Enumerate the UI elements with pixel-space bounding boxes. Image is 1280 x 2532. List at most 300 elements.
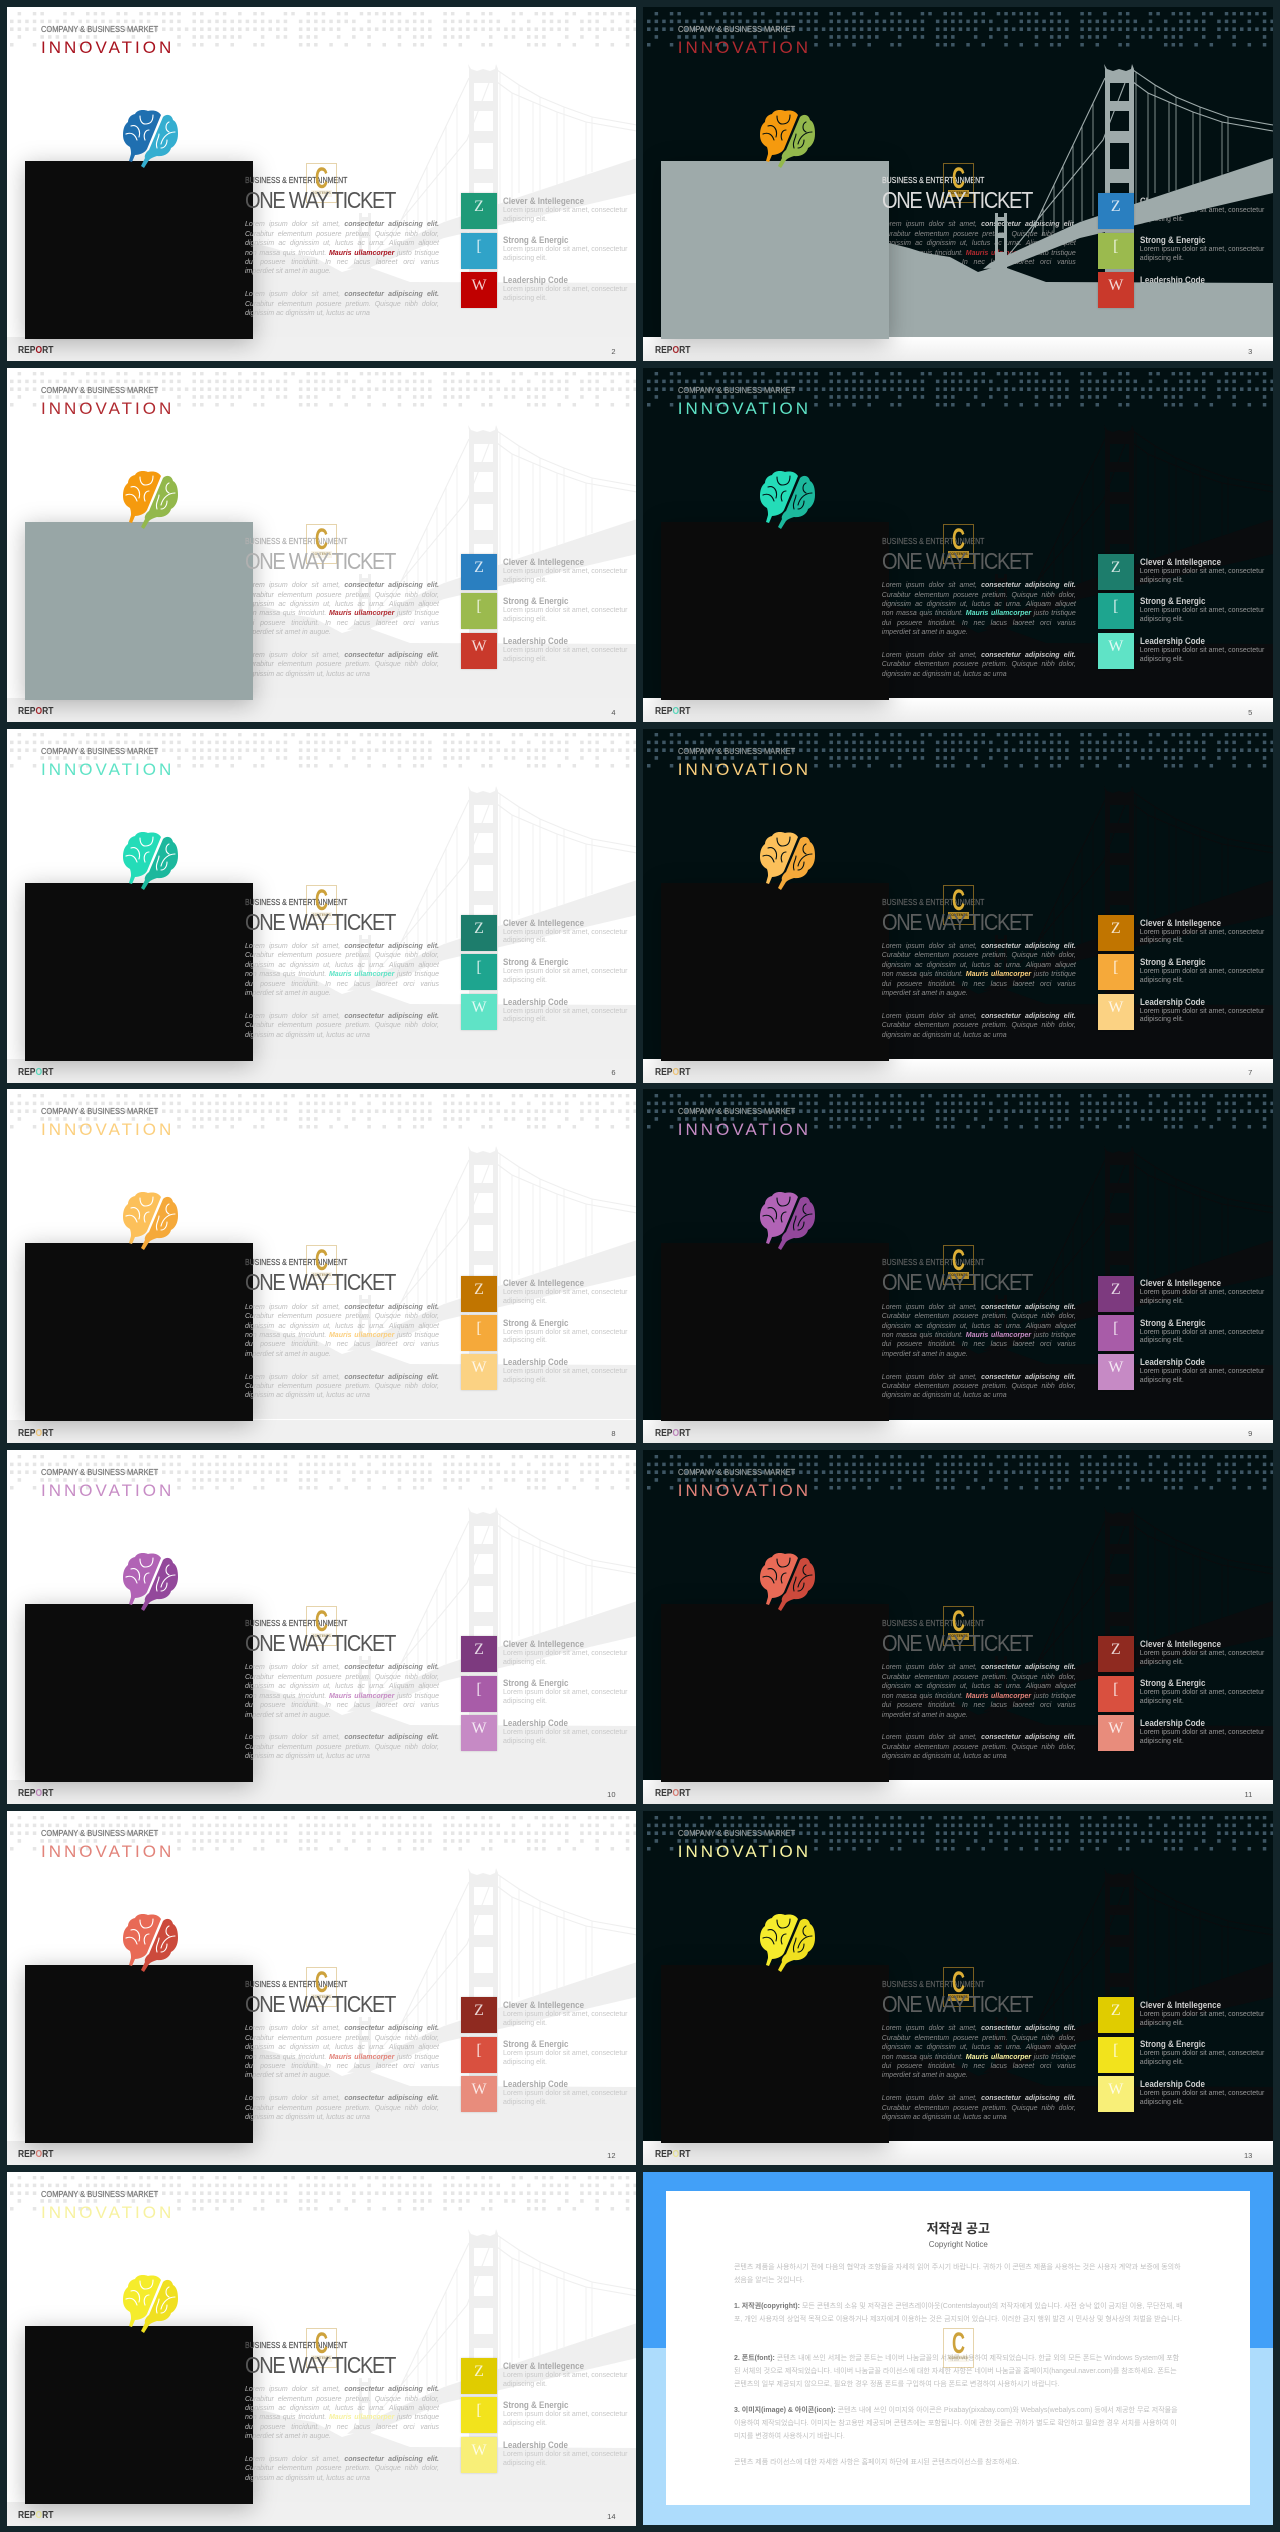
square I <box>1098 1315 1134 1351</box>
square W <box>461 994 497 1030</box>
text block: non massa quis tincidunt. Mauris ullamcorper justo tristique <box>245 971 439 978</box>
illustration: bridge <box>643 1089 1273 1436</box>
header: COMPANY & BUSINESS MARKET <box>678 1467 795 1477</box>
text block: Lorem ipsum dolor sit amet, consectetur adipiscing elit. <box>245 291 439 298</box>
header: INNOVATION <box>678 399 811 418</box>
header: COMPANY & BUSINESS MARKET <box>678 1106 795 1116</box>
item: strong: Strong & Energic <box>1140 1678 1205 1688</box>
text block: non massa quis tincidunt. Mauris ullamcorper justo tristique <box>882 610 1076 617</box>
header <box>41 2189 181 2220</box>
text block: dignissim ac dignissim ut, luctus ac urna <box>882 1032 1007 1039</box>
square I <box>461 954 497 990</box>
square W <box>1098 1354 1134 1390</box>
item: strong <box>503 957 628 984</box>
icon: brain <box>123 471 178 529</box>
item: leadership: Leadership Code <box>503 1718 568 1728</box>
panel: slide 5 <box>643 368 1273 722</box>
text block: dignissim ac dignissim ut, luctus ac urna <box>245 1032 370 1039</box>
text block: non massa quis tincidunt. Mauris ullamcorper justo tristique <box>882 250 1076 257</box>
square I <box>1098 2037 1134 2073</box>
text block: dui posuere tincidunt. In nec lacus laoreet orci varius <box>882 259 1076 266</box>
square W: W <box>1108 1720 1123 1737</box>
item: strong <box>1140 596 1264 623</box>
square Z: Z <box>474 1281 484 1298</box>
item: clever <box>1140 918 1264 944</box>
item: leadership <box>1140 275 1264 302</box>
logo: C <box>315 884 328 917</box>
notice intro: 콘텐츠 제품을 사용하시기 전에 다음의 협약과 조항들을 자세히 읽어 주시기 바랍니다. 귀하가 이 콘텐츠 제품을 사용하는 것은 사용자 계약과 보증에 동의하셨음을 알리는 것입니다. <box>734 2264 1181 2284</box>
square I: [ <box>1113 1320 1118 1337</box>
text block: Lorem ipsum dolor sit amet, consectetur adipiscing elit. <box>882 1664 1076 1671</box>
text block: Lorem ipsum dolor sit amet, consectetur adipiscing elit. <box>245 943 439 950</box>
text block <box>882 220 1076 317</box>
text block: dignissim ac dignissim ut, luctus ac urna <box>882 671 1007 678</box>
logo <box>943 1606 974 1646</box>
header <box>41 1828 181 1859</box>
icon: brain <box>760 1192 815 1252</box>
header <box>678 1467 818 1498</box>
illustration: bridge <box>6 1089 636 1436</box>
heading: ONE WAY TICKET <box>245 1991 395 2017</box>
heading: ONE WAY TICKET <box>245 1630 395 1656</box>
text block: dignissim ac dignissim ut, luctus ac urna. Aliquam aliquet <box>882 601 1076 608</box>
item: clever: Clever & Intellegence <box>1140 1639 1221 1649</box>
square W: W <box>1108 638 1123 655</box>
square I: [ <box>1113 2042 1118 2059</box>
square Z <box>461 2358 497 2394</box>
text block: Lorem ipsum dolor sit amet, consectetur adipiscing elit. <box>245 221 439 228</box>
footer: report and page number: REPORT <box>18 1428 53 1439</box>
square W: W <box>471 2081 487 2098</box>
square W: W <box>471 1359 487 1376</box>
text block: dignissim ac dignissim ut, luctus ac urna. Aliquam aliquet <box>245 240 439 247</box>
notice title: 저작권 공고 <box>927 2221 990 2236</box>
header <box>41 1467 181 1498</box>
text block: imperdiet sit amet in augue. <box>882 268 968 275</box>
text block: non massa quis tincidunt. Mauris ullamcorper justo tristique <box>245 2054 439 2061</box>
text block: dui posuere tincidunt. In nec lacus laoreet orci varius <box>882 620 1076 627</box>
text block: imperdiet sit amet in augue. <box>882 2072 968 2079</box>
logo <box>943 524 974 564</box>
logo: CONTENTS <box>949 913 968 917</box>
item: strong: Strong & Energic <box>1140 957 1205 967</box>
header: INNOVATION <box>678 760 811 779</box>
item: clever <box>1140 196 1264 223</box>
square I: [ <box>1113 959 1118 976</box>
item: clever: Lorem ipsum dolor sit amet, consectetur adipiscing elit. <box>503 2011 628 2027</box>
logo: C <box>315 523 328 556</box>
header <box>41 385 174 418</box>
text block: Curabitur elementum posuere pretium. Quisque nibh dolor, <box>245 231 439 238</box>
image placeholder <box>661 1243 889 1421</box>
square W: W <box>1108 2081 1123 2098</box>
text block: Curabitur elementum posuere pretium. Quisque nibh dolor, <box>882 1313 1076 1320</box>
square I <box>1098 593 1134 629</box>
item: clever <box>503 1639 631 1669</box>
item: strong: Strong & Energic <box>503 1318 568 1328</box>
icon: brain <box>760 110 815 168</box>
item: clever: Lorem ipsum dolor sit amet, consectetur adipiscing elit. <box>1140 1650 1264 1666</box>
item: clever: Lorem ipsum dolor sit amet, consectetur adipiscing elit. <box>503 929 628 944</box>
image placeholder <box>661 522 889 700</box>
panel: slide 11 <box>643 1450 1273 1804</box>
text block: Lorem ipsum dolor sit amet, consectetur adipiscing elit. <box>882 2025 1076 2032</box>
item: clever: Lorem ipsum dolor sit amet, consectetur adipiscing elit. <box>1140 1289 1264 1305</box>
text block: Lorem ipsum dolor sit amet, consectetur adipiscing elit. <box>882 1013 1076 1020</box>
item: clever <box>503 2000 631 2030</box>
square I <box>1098 1676 1134 1712</box>
item: clever <box>503 557 628 584</box>
item: clever: Lorem ipsum dolor sit amet, consectetur adipiscing elit. <box>1140 929 1264 944</box>
item: clever <box>1140 1278 1268 1308</box>
panel: slide 7 <box>643 729 1273 1083</box>
header: INNOVATION <box>678 38 811 57</box>
square W <box>1098 633 1134 669</box>
header: INNOVATION <box>41 2203 174 2222</box>
logo: CONTENTS <box>312 1273 331 1277</box>
logo: C <box>952 1605 965 1638</box>
panel: slide 9 <box>643 1089 1273 1443</box>
item: clever: Clever & Intellegence <box>503 2000 584 2010</box>
text block: Lorem ipsum dolor sit amet, consectetur adipiscing elit. <box>245 2456 439 2463</box>
item: strong: Lorem ipsum dolor sit amet, consectetur adipiscing elit. <box>503 2411 628 2427</box>
text block: dui posuere tincidunt. In nec lacus laoreet orci varius <box>245 981 439 988</box>
logo <box>306 1606 337 1646</box>
square I <box>1098 233 1134 269</box>
footer: report and page number <box>643 1059 1273 1083</box>
text block: dignissim ac dignissim ut, luctus ac urna. Aliquam aliquet <box>245 2405 439 2412</box>
subheading: BUSINESS & ENTERTAINMENT <box>245 2340 347 2350</box>
logo <box>943 1967 974 2007</box>
text block <box>245 2385 439 2483</box>
text block <box>245 2024 439 2122</box>
item: strong: Lorem ipsum dolor sit amet, consectetur adipiscing elit. <box>1140 968 1264 984</box>
icon: brain <box>760 1914 815 1974</box>
text block: Curabitur elementum posuere pretium. Quisque nibh dolor, <box>245 1383 439 1390</box>
heading: ONE WAY TICKET <box>245 187 395 213</box>
illustration: bridge <box>253 786 636 1059</box>
square I: [ <box>476 2402 482 2419</box>
logo: CONTENTS <box>312 552 331 556</box>
item: leadership <box>1140 2079 1268 2109</box>
panel: slide 6 <box>6 729 636 1083</box>
image placeholder <box>661 1604 889 1782</box>
item: strong: Lorem ipsum dolor sit amet, consectetur adipiscing elit. <box>1140 1329 1264 1344</box>
square Z <box>461 1276 497 1312</box>
panel: slide 14 <box>6 2172 636 2526</box>
text block: Lorem ipsum dolor sit amet, consectetur adipiscing elit. <box>882 582 1076 589</box>
heading: ONE WAY TICKET <box>882 1991 1032 2017</box>
text block: non massa quis tincidunt. Mauris ullamcorper justo tristique <box>882 1693 1076 1700</box>
footer: report and page number: 10 <box>607 1790 616 1799</box>
notice clause 3: 3. 이미지(image) & 아이콘(icon): 콘텐츠 내에 쓰인 이미지와 아이콘은 Pixabay(pixabay.com)와 Webalys(webalys.com) 등에서 제공한 무료 저작물을 이용하여 제작되었습니다. 이미지는 참고용만 제공되며 콘텐츠에는 포함됩니다. 이에 관한 것들은 귀하가 별도로 확인하고 필요한 경우 서치를 사용하여 이미지를 변경하여 사용하시기 바랍니다. <box>734 2407 1178 2440</box>
item: leadership: Lorem ipsum dolor sit amet, consectetur adipiscing elit. <box>503 647 628 662</box>
item: leadership: Leadership Code <box>1140 1357 1205 1367</box>
square Z: Z <box>474 198 484 215</box>
text block: dignissim ac dignissim ut, luctus ac urna <box>245 2114 370 2121</box>
text block: dui posuere tincidunt. In nec lacus laoreet orci varius <box>245 1341 439 1348</box>
text block: Curabitur elementum posuere pretium. Quisque nibh dolor, <box>882 2105 1076 2112</box>
item: leadership: Lorem ipsum dolor sit amet, consectetur adipiscing elit. <box>1140 647 1264 662</box>
square W: W <box>471 1720 487 1737</box>
logo: CONTENTS <box>312 191 331 195</box>
logo: C <box>952 162 965 195</box>
square Z <box>461 554 497 590</box>
logo <box>306 2328 337 2368</box>
item: leadership: Lorem ipsum dolor sit amet, consectetur adipiscing elit. <box>1140 1368 1264 1384</box>
icon: brain <box>760 1553 815 1613</box>
text block: Lorem ipsum dolor sit amet, consectetur adipiscing elit. <box>245 1734 439 1741</box>
header <box>678 746 811 779</box>
text block: Curabitur elementum posuere pretium. Quisque nibh dolor, <box>245 1744 439 1751</box>
footer: report and page number: REPORT <box>655 2149 690 2160</box>
item: clever: Clever & Intellegence <box>503 1639 584 1649</box>
text block: dignissim ac dignissim ut, luctus ac urna. Aliquam aliquet <box>882 1683 1076 1690</box>
square Z: Z <box>474 559 484 576</box>
icon: brain <box>123 1553 178 1613</box>
square W: W <box>1108 999 1123 1016</box>
header: INNOVATION <box>41 399 174 418</box>
heading: ONE WAY TICKET <box>882 187 1032 213</box>
item: strong: Strong & Energic <box>503 235 568 245</box>
logo <box>306 885 337 925</box>
item: strong: Strong & Energic <box>1140 596 1205 606</box>
footer: report and page number: REPORT <box>655 345 690 356</box>
item: clever: Clever & Intellegence <box>503 557 584 567</box>
subheading: BUSINESS & ENTERTAINMENT <box>882 175 984 185</box>
footer: report and page number: 5 <box>1248 708 1252 717</box>
item: clever <box>1140 1639 1268 1669</box>
text block: imperdiet sit amet in augue. <box>245 268 331 275</box>
item: leadership: Lorem ipsum dolor sit amet, consectetur adipiscing elit. <box>503 1729 628 1745</box>
header: INNOVATION <box>678 1481 811 1500</box>
square W <box>1098 2076 1134 2112</box>
subheading: BUSINESS & ENTERTAINMENT <box>245 1618 347 1628</box>
square I <box>461 2397 497 2433</box>
square W <box>1098 1715 1134 1751</box>
item: strong: Strong & Energic <box>1140 235 1205 245</box>
item: clever: Clever & Intellegence <box>503 196 584 206</box>
text block: Lorem ipsum dolor sit amet, consectetur adipiscing elit. <box>882 1304 1076 1311</box>
item: leadership: Leadership Code <box>503 2079 568 2089</box>
text block <box>245 582 440 678</box>
header: COMPANY & BUSINESS MARKET <box>41 24 158 34</box>
subheading: BUSINESS & ENTERTAINMENT <box>882 1979 984 1989</box>
square Z: Z <box>474 920 484 937</box>
text block: Curabitur elementum posuere pretium. Quisque nibh dolor, <box>882 1744 1076 1751</box>
item: leadership <box>1140 997 1268 1027</box>
item: leadership <box>503 2079 631 2109</box>
heading: ONE WAY TICKET <box>882 1269 1032 1295</box>
item: leadership: Leadership Code <box>503 275 568 285</box>
text block <box>882 1663 1076 1762</box>
square W: W <box>471 277 487 294</box>
notice clause 2: 2. 폰트(font): 콘텐츠 내에 쓰인 서체는 한글 폰트는 네이버 나눔글꼴의 서체를 사용하여 제작되었습니다. 한글 외의 모든 폰트는 Windows System에 포함된 서체의 것으로 제작되었습니다. 네이버 나눔글꼴 라이선스에 대한 자세한 사항은 네이버 나눔글꼴 홈페이지(hangeul.naver.com)를 참조하세요. 폰트는 콘텐츠의 일부 제공되지 않으므로, 필요한 경우 정품 폰트를 구입하여 다음 폰트로 변경하여 사용하시기 바랍니다. <box>734 2355 1179 2388</box>
item: strong <box>503 235 628 262</box>
text block: dui posuere tincidunt. In nec lacus laoreet orci varius <box>245 620 439 627</box>
square W <box>461 2437 497 2473</box>
header: INNOVATION <box>678 1120 811 1139</box>
item: clever: Lorem ipsum dolor sit amet, consectetur adipiscing elit. <box>1140 568 1264 584</box>
footer: report and page number: 2 <box>611 347 616 356</box>
logo: CONTENTS <box>949 1634 968 1638</box>
illustration: bridge <box>6 1450 636 1797</box>
logo: CONTENTS <box>949 1273 968 1277</box>
footer: report and page number: 14 <box>607 2512 616 2521</box>
subheading: BUSINESS & ENTERTAINMENT <box>245 1257 347 1267</box>
text block: dignissim ac dignissim ut, luctus ac urna. Aliquam aliquet <box>245 601 439 608</box>
item: strong: Strong & Energic <box>1140 2039 1205 2049</box>
logo: CONTENTS <box>312 913 331 917</box>
text block: Curabitur elementum posuere pretium. Quisque nibh dolor, <box>882 301 1076 308</box>
panel: slide 13 <box>643 1811 1273 2165</box>
item: leadership <box>1140 636 1264 662</box>
text block: Lorem ipsum dolor sit amet, consectetur adipiscing elit. <box>882 291 1076 298</box>
square W <box>461 633 497 669</box>
text block: imperdiet sit amet in augue. <box>245 2433 331 2440</box>
footer: report and page number <box>6 337 636 361</box>
footer: report and page number: 9 <box>1248 1429 1252 1438</box>
text block: Lorem ipsum dolor sit amet, consectetur adipiscing elit. <box>882 1734 1076 1741</box>
header: INNOVATION <box>41 1842 174 1861</box>
square I <box>461 2037 497 2073</box>
footer: report and page number: REPORT <box>18 2510 53 2521</box>
text block: dignissim ac dignissim ut, luctus ac urna. Aliquam aliquet <box>245 2044 439 2051</box>
header: COMPANY & BUSINESS MARKET <box>678 385 795 395</box>
item: strong: Lorem ipsum dolor sit amet, consectetur adipiscing elit. <box>503 1329 628 1344</box>
square W: W <box>471 2442 487 2459</box>
text block: non massa quis tincidunt. Mauris ullamcorper justo tristique <box>882 1332 1076 1339</box>
subheading: BUSINESS & ENTERTAINMENT <box>882 1618 984 1628</box>
text block: non massa quis tincidunt. Mauris ullamcorper justo tristique <box>882 2054 1076 2061</box>
text block: dignissim ac dignissim ut, luctus ac urna <box>245 1753 370 1760</box>
footer: report and page number: 4 <box>611 708 616 717</box>
logo: C <box>952 523 965 556</box>
square I <box>461 233 497 269</box>
text block <box>882 2024 1076 2122</box>
header: COMPANY & BUSINESS MARKET <box>41 746 158 756</box>
item: leadership: Leadership Code <box>1140 2079 1205 2089</box>
text block: Lorem ipsum dolor sit amet, consectetur adipiscing elit. <box>245 582 439 589</box>
text block <box>245 1303 439 1401</box>
logo: CONTENTS <box>312 2356 331 2360</box>
square Z: Z <box>474 2002 484 2019</box>
item: strong: Lorem ipsum dolor sit amet, consectetur adipiscing elit. <box>1140 1689 1264 1705</box>
illustration: bridge <box>643 1811 1273 2158</box>
square W <box>461 1354 497 1390</box>
item: leadership: Leadership Code <box>1140 275 1205 285</box>
square Z: Z <box>1111 559 1121 576</box>
item: leadership <box>503 275 628 302</box>
image placeholder <box>24 522 252 700</box>
text block: Curabitur elementum posuere pretium. Quisque nibh dolor, <box>245 592 439 599</box>
square Z <box>1098 193 1134 229</box>
item: strong <box>503 1678 631 1708</box>
header: COMPANY & BUSINESS MARKET <box>41 385 158 395</box>
text block: Lorem ipsum dolor sit amet, consectetur adipiscing elit. <box>245 1664 439 1671</box>
header: INNOVATION <box>41 1120 174 1139</box>
square Z <box>461 1636 497 1672</box>
text block: dui posuere tincidunt. In nec lacus laoreet orci varius <box>245 1702 439 1709</box>
heading: ONE WAY TICKET <box>245 548 395 574</box>
header: INNOVATION <box>41 1481 174 1500</box>
footer: report and page number: REPORT <box>655 1067 690 1078</box>
square Z <box>1098 915 1134 951</box>
footer: report and page number: 11 <box>1244 1790 1252 1799</box>
logo <box>306 163 337 203</box>
logo <box>943 1245 974 1285</box>
subheading: BUSINESS & ENTERTAINMENT <box>245 897 347 907</box>
item: strong <box>1140 2039 1268 2069</box>
heading: ONE WAY TICKET <box>245 1269 395 1295</box>
text block: Curabitur elementum posuere pretium. Quisque nibh dolor, <box>882 1674 1076 1681</box>
footer: report and page number <box>6 1420 636 1443</box>
item: clever: Clever & Intellegence <box>503 2361 584 2371</box>
item: strong <box>503 596 628 623</box>
subheading: BUSINESS & ENTERTAINMENT <box>882 536 984 546</box>
text block: dignissim ac dignissim ut, luctus ac urna. Aliquam aliquet <box>245 962 439 969</box>
text block: non massa quis tincidunt. Mauris ullamcorper justo tristique <box>245 1332 439 1339</box>
square I: [ <box>1113 1681 1118 1698</box>
item: clever: Clever & Intellegence <box>1140 2000 1221 2010</box>
text block: Curabitur elementum posuere pretium. Quisque nibh dolor, <box>882 1383 1076 1390</box>
logo <box>306 1967 337 2007</box>
logo: C <box>952 1244 965 1277</box>
item: strong: Strong & Energic <box>503 596 568 606</box>
item: leadership: Lorem ipsum dolor sit amet, consectetur adipiscing elit. <box>503 286 628 302</box>
text block: dui posuere tincidunt. In nec lacus laoreet orci varius <box>882 1341 1076 1348</box>
square I: [ <box>476 2042 482 2059</box>
item: leadership: Lorem ipsum dolor sit amet, consectetur adipiscing elit. <box>1140 1729 1264 1745</box>
footer: report and page number <box>643 698 1273 722</box>
icon: brain <box>123 110 178 168</box>
item: clever <box>1140 2000 1268 2030</box>
image placeholder <box>661 883 889 1061</box>
header <box>678 24 811 57</box>
text block: Curabitur elementum posuere pretium. Quisque nibh dolor, <box>245 2465 439 2472</box>
text block: imperdiet sit amet in augue. <box>245 990 331 997</box>
footer: report and page number: REPORT <box>18 706 53 717</box>
illustration: bridge <box>253 426 636 698</box>
text block: Curabitur elementum posuere pretium. Quisque nibh dolor, <box>245 2396 439 2403</box>
text block: Lorem ipsum dolor sit amet, consectetur adipiscing elit. <box>882 652 1076 659</box>
item: leadership: Leadership Code <box>503 1357 568 1367</box>
text block: imperdiet sit amet in augue. <box>882 1712 968 1719</box>
text block: dui posuere tincidunt. In nec lacus laoreet orci varius <box>245 259 439 266</box>
text block: Curabitur elementum posuere pretium. Quisque nibh dolor, <box>245 2105 439 2112</box>
square I: [ <box>1113 598 1118 615</box>
item: clever: Clever & Intellegence <box>503 1278 584 1288</box>
item: leadership: Leadership Code <box>503 636 568 646</box>
logo: C <box>315 162 328 195</box>
image placeholder <box>24 161 252 339</box>
header: INNOVATION <box>41 38 174 57</box>
item: strong: Lorem ipsum dolor sit amet, consectetur adipiscing elit. <box>1140 2050 1264 2066</box>
square I: [ <box>476 1320 482 1337</box>
item: strong: Strong & Energic <box>503 2400 568 2410</box>
square I: [ <box>476 959 482 976</box>
text block: imperdiet sit amet in augue. <box>882 990 968 997</box>
text block: Curabitur elementum posuere pretium. Quisque nibh dolor, <box>245 952 439 959</box>
text block: dui posuere tincidunt. In nec lacus laoreet orci varius <box>882 2063 1076 2070</box>
notice subtitle: Copyright Notice <box>929 2240 988 2249</box>
text block: dui posuere tincidunt. In nec lacus laoreet orci varius <box>245 2063 439 2070</box>
footer: report and page number <box>643 1780 1273 1804</box>
text block: non massa quis tincidunt. Mauris ullamcorper justo tristique <box>882 971 1076 978</box>
header <box>41 746 174 779</box>
square Z <box>1098 1636 1134 1672</box>
text block: dignissim ac dignissim ut, luctus ac urna <box>882 2114 1007 2121</box>
